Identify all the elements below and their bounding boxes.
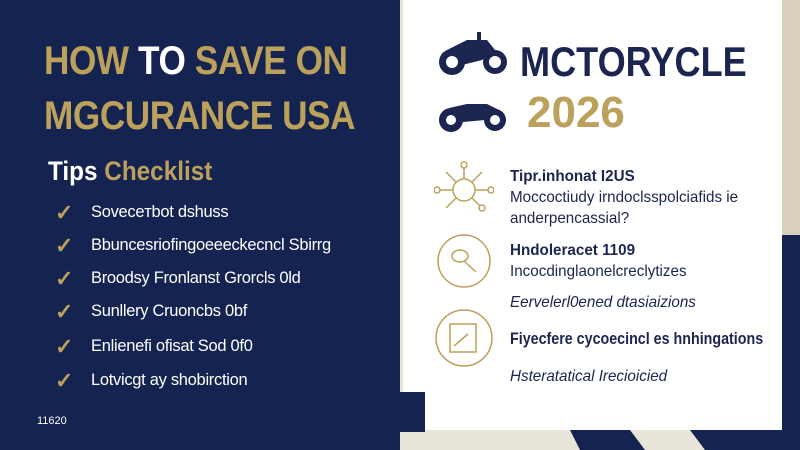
checklist: ✓ [55, 200, 73, 225]
year: 2026 [527, 88, 625, 137]
title: HOW TO SAVE ON [44, 39, 348, 83]
footer number: 11620 [37, 415, 67, 427]
icon: motorcycle 2 [439, 104, 506, 132]
tip 4: Fiyecfere cycoecincl es hnhingations [510, 329, 763, 348]
tip 5: Hsteratatical Irecioicied [510, 368, 667, 385]
checklist [55, 200, 331, 393]
background decor right [400, 0, 800, 450]
subheading: Tips Checklist [48, 156, 212, 186]
checklist: ✓ [55, 334, 73, 359]
checklist: ✓ [55, 266, 73, 291]
tip 1 [510, 168, 738, 227]
icon: sun network [434, 161, 494, 212]
icon: gauge [437, 234, 491, 288]
checklist: Bbuncesriofingoeeeckecncl Sbirrg [91, 236, 331, 254]
title [44, 39, 355, 138]
checklist: ✓ [55, 233, 73, 258]
icon: motorcycle 1 [439, 32, 507, 75]
title: MGCURANCE USA [44, 94, 355, 138]
checklist: Enlienefi ofisat Sod 0f0 [91, 337, 253, 355]
tip 2: Hndoleracet 1109 [510, 242, 635, 259]
white panel [403, 0, 782, 430]
tip 3: Eervelerl0ened dtasiaizions [510, 294, 696, 311]
tip 1: Tipr.inhonat I2US [510, 168, 635, 185]
checklist: Lotvicgt ay shobirction [91, 371, 247, 389]
checklist: ✓ [55, 368, 73, 393]
tip 1: anderpencassial? [510, 210, 629, 227]
checklist: Sunllery Cruoncbs 0bf [91, 302, 247, 320]
tip 2: Incocdinglaonelcreclytizes [510, 263, 687, 280]
heading: motorcycle: MCTORYCLE [520, 38, 747, 85]
tip 1: Moccoctiudy irndoclsspolciafids ie [510, 189, 738, 206]
checklist: ✓ [55, 299, 73, 324]
icon: document [435, 309, 493, 367]
checklist: Broodsy Fronlanst Grorcls 0ld [91, 269, 301, 287]
checklist: Soveceтbot dshuss [91, 203, 228, 221]
tip 2 [510, 242, 687, 280]
